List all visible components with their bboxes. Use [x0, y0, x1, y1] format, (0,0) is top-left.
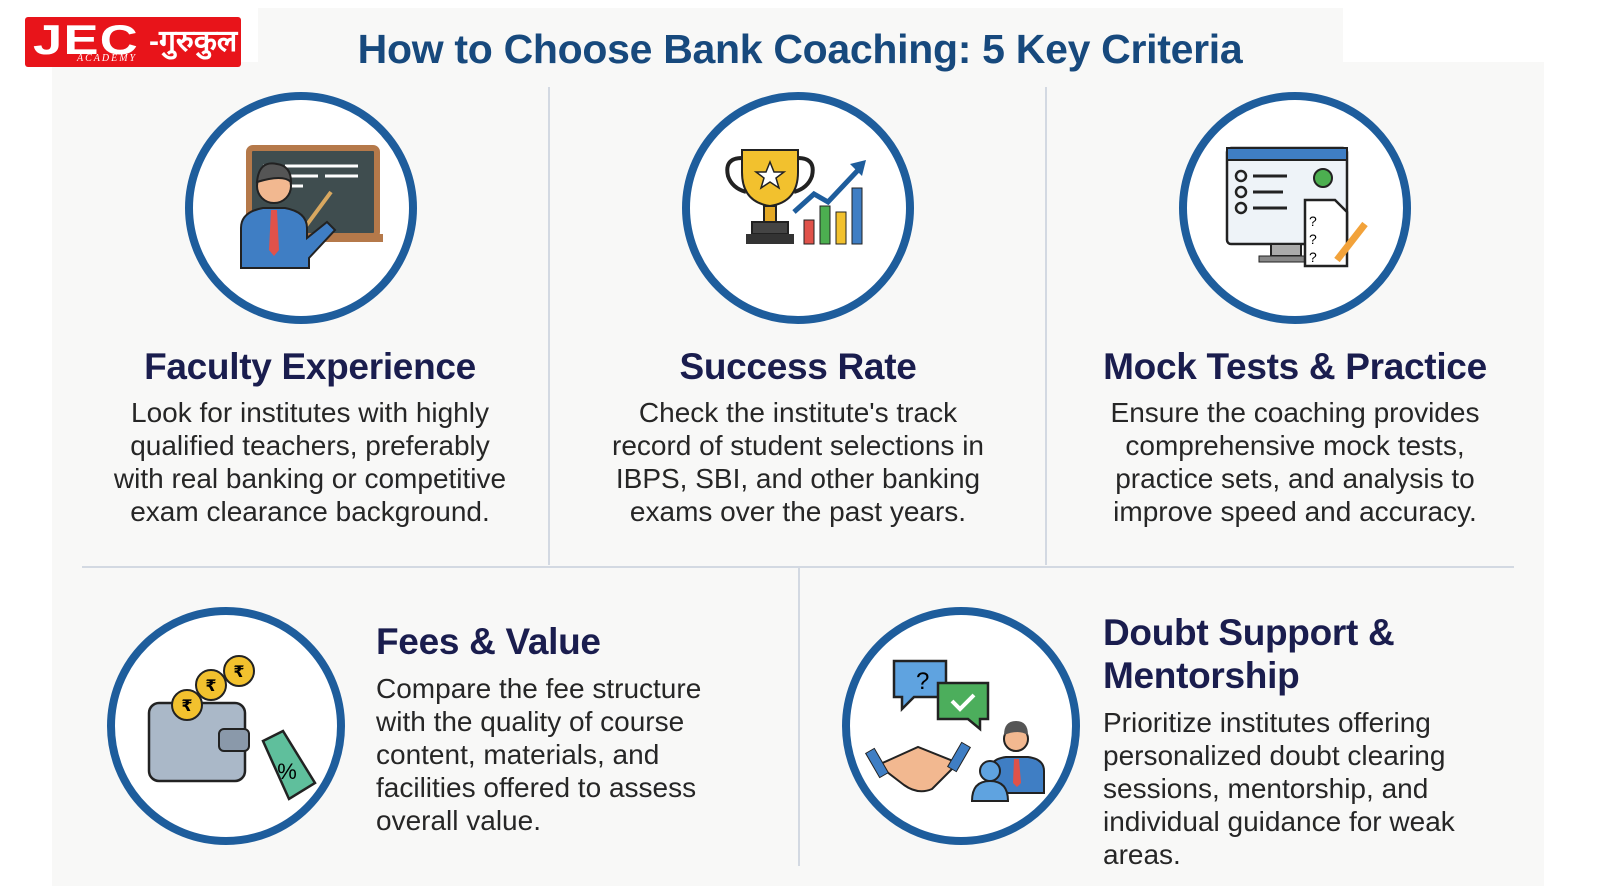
text block: Look for institutes with highly [131, 397, 489, 428]
panel: doubt support [842, 607, 1455, 870]
logo: JEC [33, 17, 139, 63]
icon: wallet with coins and tag: % [277, 759, 297, 784]
icon: chat, handshake, mentor [842, 607, 1080, 845]
panel: mock tests [1103, 92, 1487, 527]
icon: wallet with coins and tag: ₹ [205, 678, 217, 695]
icon: chat, handshake, mentor: ? [916, 668, 929, 695]
icon: wallet with coins and tag [107, 607, 345, 845]
title background [258, 8, 1343, 68]
icon: computer with test sheet: ? [1309, 249, 1317, 265]
text block: Check the institute's track [639, 397, 957, 428]
text block: exam clearance background. [130, 496, 490, 527]
icon: computer with test sheet: ? [1309, 231, 1317, 247]
text block: personalized doubt clearing [1103, 740, 1445, 771]
icon: wallet with coins and tag: ₹ [181, 698, 193, 715]
text block: individual guidance for weak [1103, 806, 1455, 837]
text block: with the quality of course [376, 706, 684, 737]
text block: with real banking or competitive [114, 463, 506, 494]
text block: record of student selections in [612, 430, 984, 461]
panel: fees and value [107, 607, 701, 845]
text block: qualified teachers, preferably [130, 430, 490, 461]
text block: improve speed and accuracy. [1113, 496, 1477, 527]
icon: computer with test sheet [1179, 92, 1411, 324]
heading [1103, 612, 1394, 696]
text block: sessions, mentorship, and [1103, 773, 1428, 804]
heading: Mock Tests & Practice [1103, 346, 1487, 387]
panel: faculty experience [114, 92, 506, 527]
text block: comprehensive mock tests, [1125, 430, 1465, 461]
text block: content, materials, and [376, 739, 659, 770]
logo: ACADEMY [77, 53, 137, 64]
heading: Mentorship [1103, 655, 1299, 696]
text block [114, 397, 506, 527]
logo: -गुरुकुल [149, 25, 237, 58]
heading: Faculty Experience [144, 346, 476, 387]
text block: areas. [1103, 839, 1181, 870]
title: How to Choose Bank Coaching: 5 Key Criteria [358, 26, 1242, 72]
text block: Ensure the coaching provides [1111, 397, 1479, 428]
text block: IBPS, SBI, and other banking [616, 463, 980, 494]
text block: practice sets, and analysis to [1115, 463, 1475, 494]
text block: Prioritize institutes offering [1103, 707, 1431, 738]
text block: exams over the past years. [630, 496, 966, 527]
text block: overall value. [376, 805, 541, 836]
panel: success rate [612, 92, 984, 527]
text block [1111, 397, 1479, 527]
text block [376, 673, 701, 836]
icon: trophy and growth chart [682, 92, 914, 324]
heading: Success Rate [679, 346, 917, 387]
icon: wallet with coins and tag: ₹ [233, 664, 245, 681]
dividers [548, 87, 550, 565]
icon: computer with test sheet: ? [1309, 213, 1317, 229]
text block [612, 397, 984, 527]
text block [1103, 707, 1455, 870]
text block: Compare the fee structure [376, 673, 701, 704]
heading: Doubt Support & [1103, 612, 1394, 653]
text block: facilities offered to assess [376, 772, 696, 803]
heading: Fees & Value [376, 621, 601, 662]
icon: teacher at blackboard [185, 92, 417, 324]
logo [25, 17, 241, 67]
